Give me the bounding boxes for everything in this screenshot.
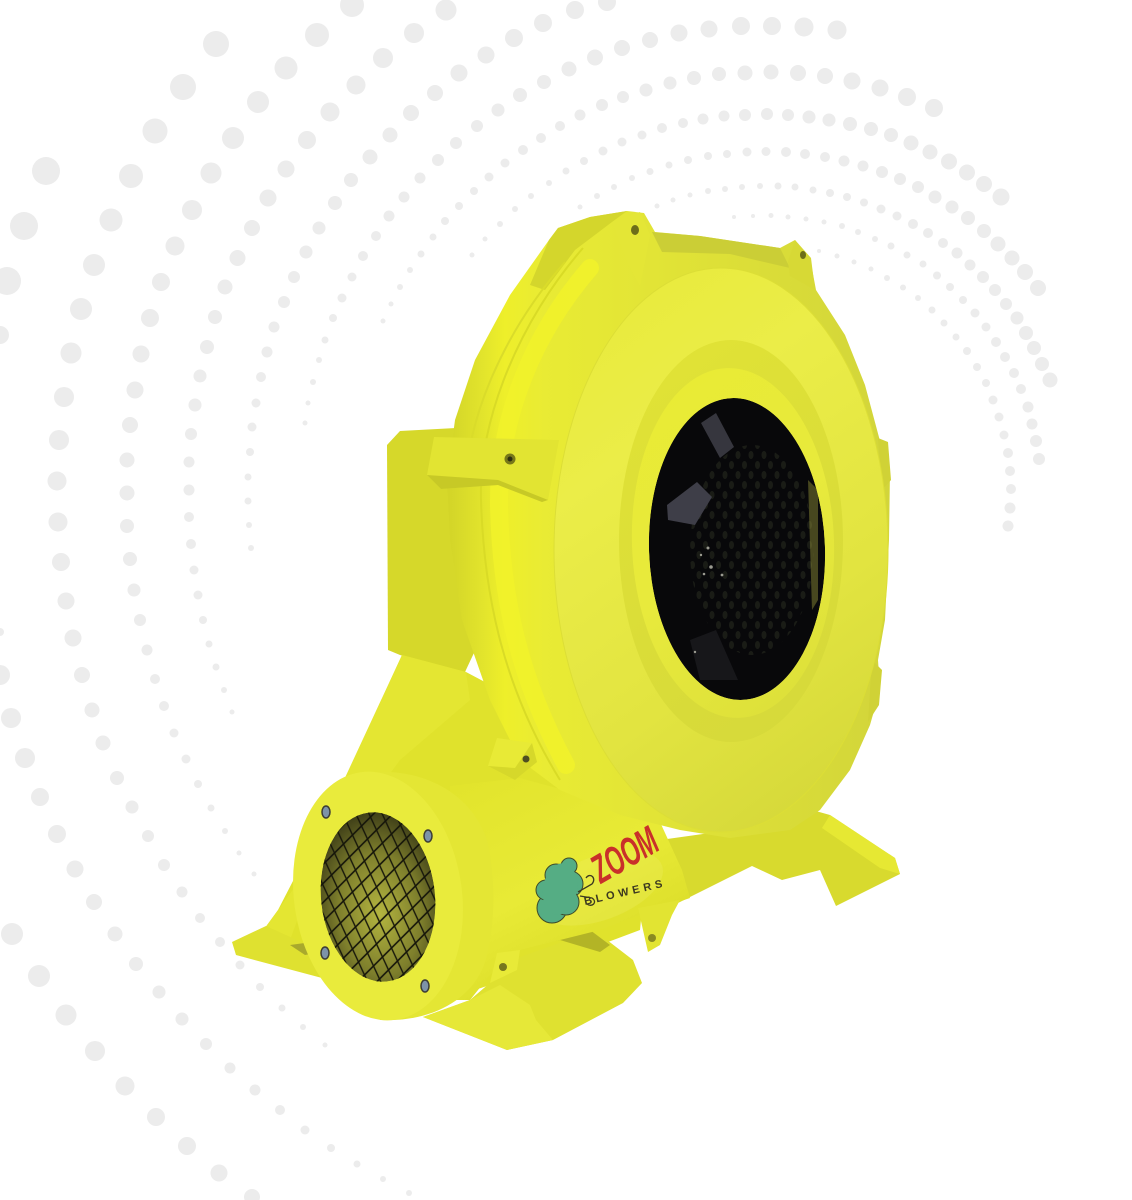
motor bracket ears [490, 900, 680, 983]
air intake with black fan [644, 395, 830, 703]
front cover [554, 268, 888, 832]
grill screws [321, 806, 432, 992]
Zoom Blowers logo [527, 818, 673, 941]
logo cloud [536, 858, 583, 923]
wire mesh grill [320, 812, 436, 982]
drum bright seams [466, 248, 590, 780]
top screw ears [612, 212, 815, 290]
centre foot [423, 930, 642, 1050]
logo wordmark: ZOOM [583, 818, 667, 892]
outlet front ring [277, 761, 479, 1031]
motor housing [440, 778, 690, 1000]
inner bevel ring [626, 365, 840, 721]
right foot [660, 808, 900, 906]
lower duct [262, 655, 650, 1005]
left foot [232, 926, 330, 978]
fan glints [694, 546, 723, 653]
top casing recesses [530, 211, 790, 290]
fan outlet cylinder [378, 772, 493, 1020]
yellow blower product [232, 211, 900, 1050]
rear box [387, 428, 480, 672]
logo cloud inner fill [539, 860, 581, 918]
lower bracket [488, 738, 537, 780]
fan grid [690, 445, 814, 655]
logo wind swirl [578, 876, 595, 905]
main drum casing [447, 211, 890, 838]
logo subtitle: BLOWERS [583, 878, 664, 908]
logo backing [527, 835, 673, 941]
left mounting bracket [427, 437, 559, 502]
side bumps [868, 438, 891, 722]
raised ring around air intake [619, 340, 843, 742]
fan blade highlights [667, 413, 818, 680]
